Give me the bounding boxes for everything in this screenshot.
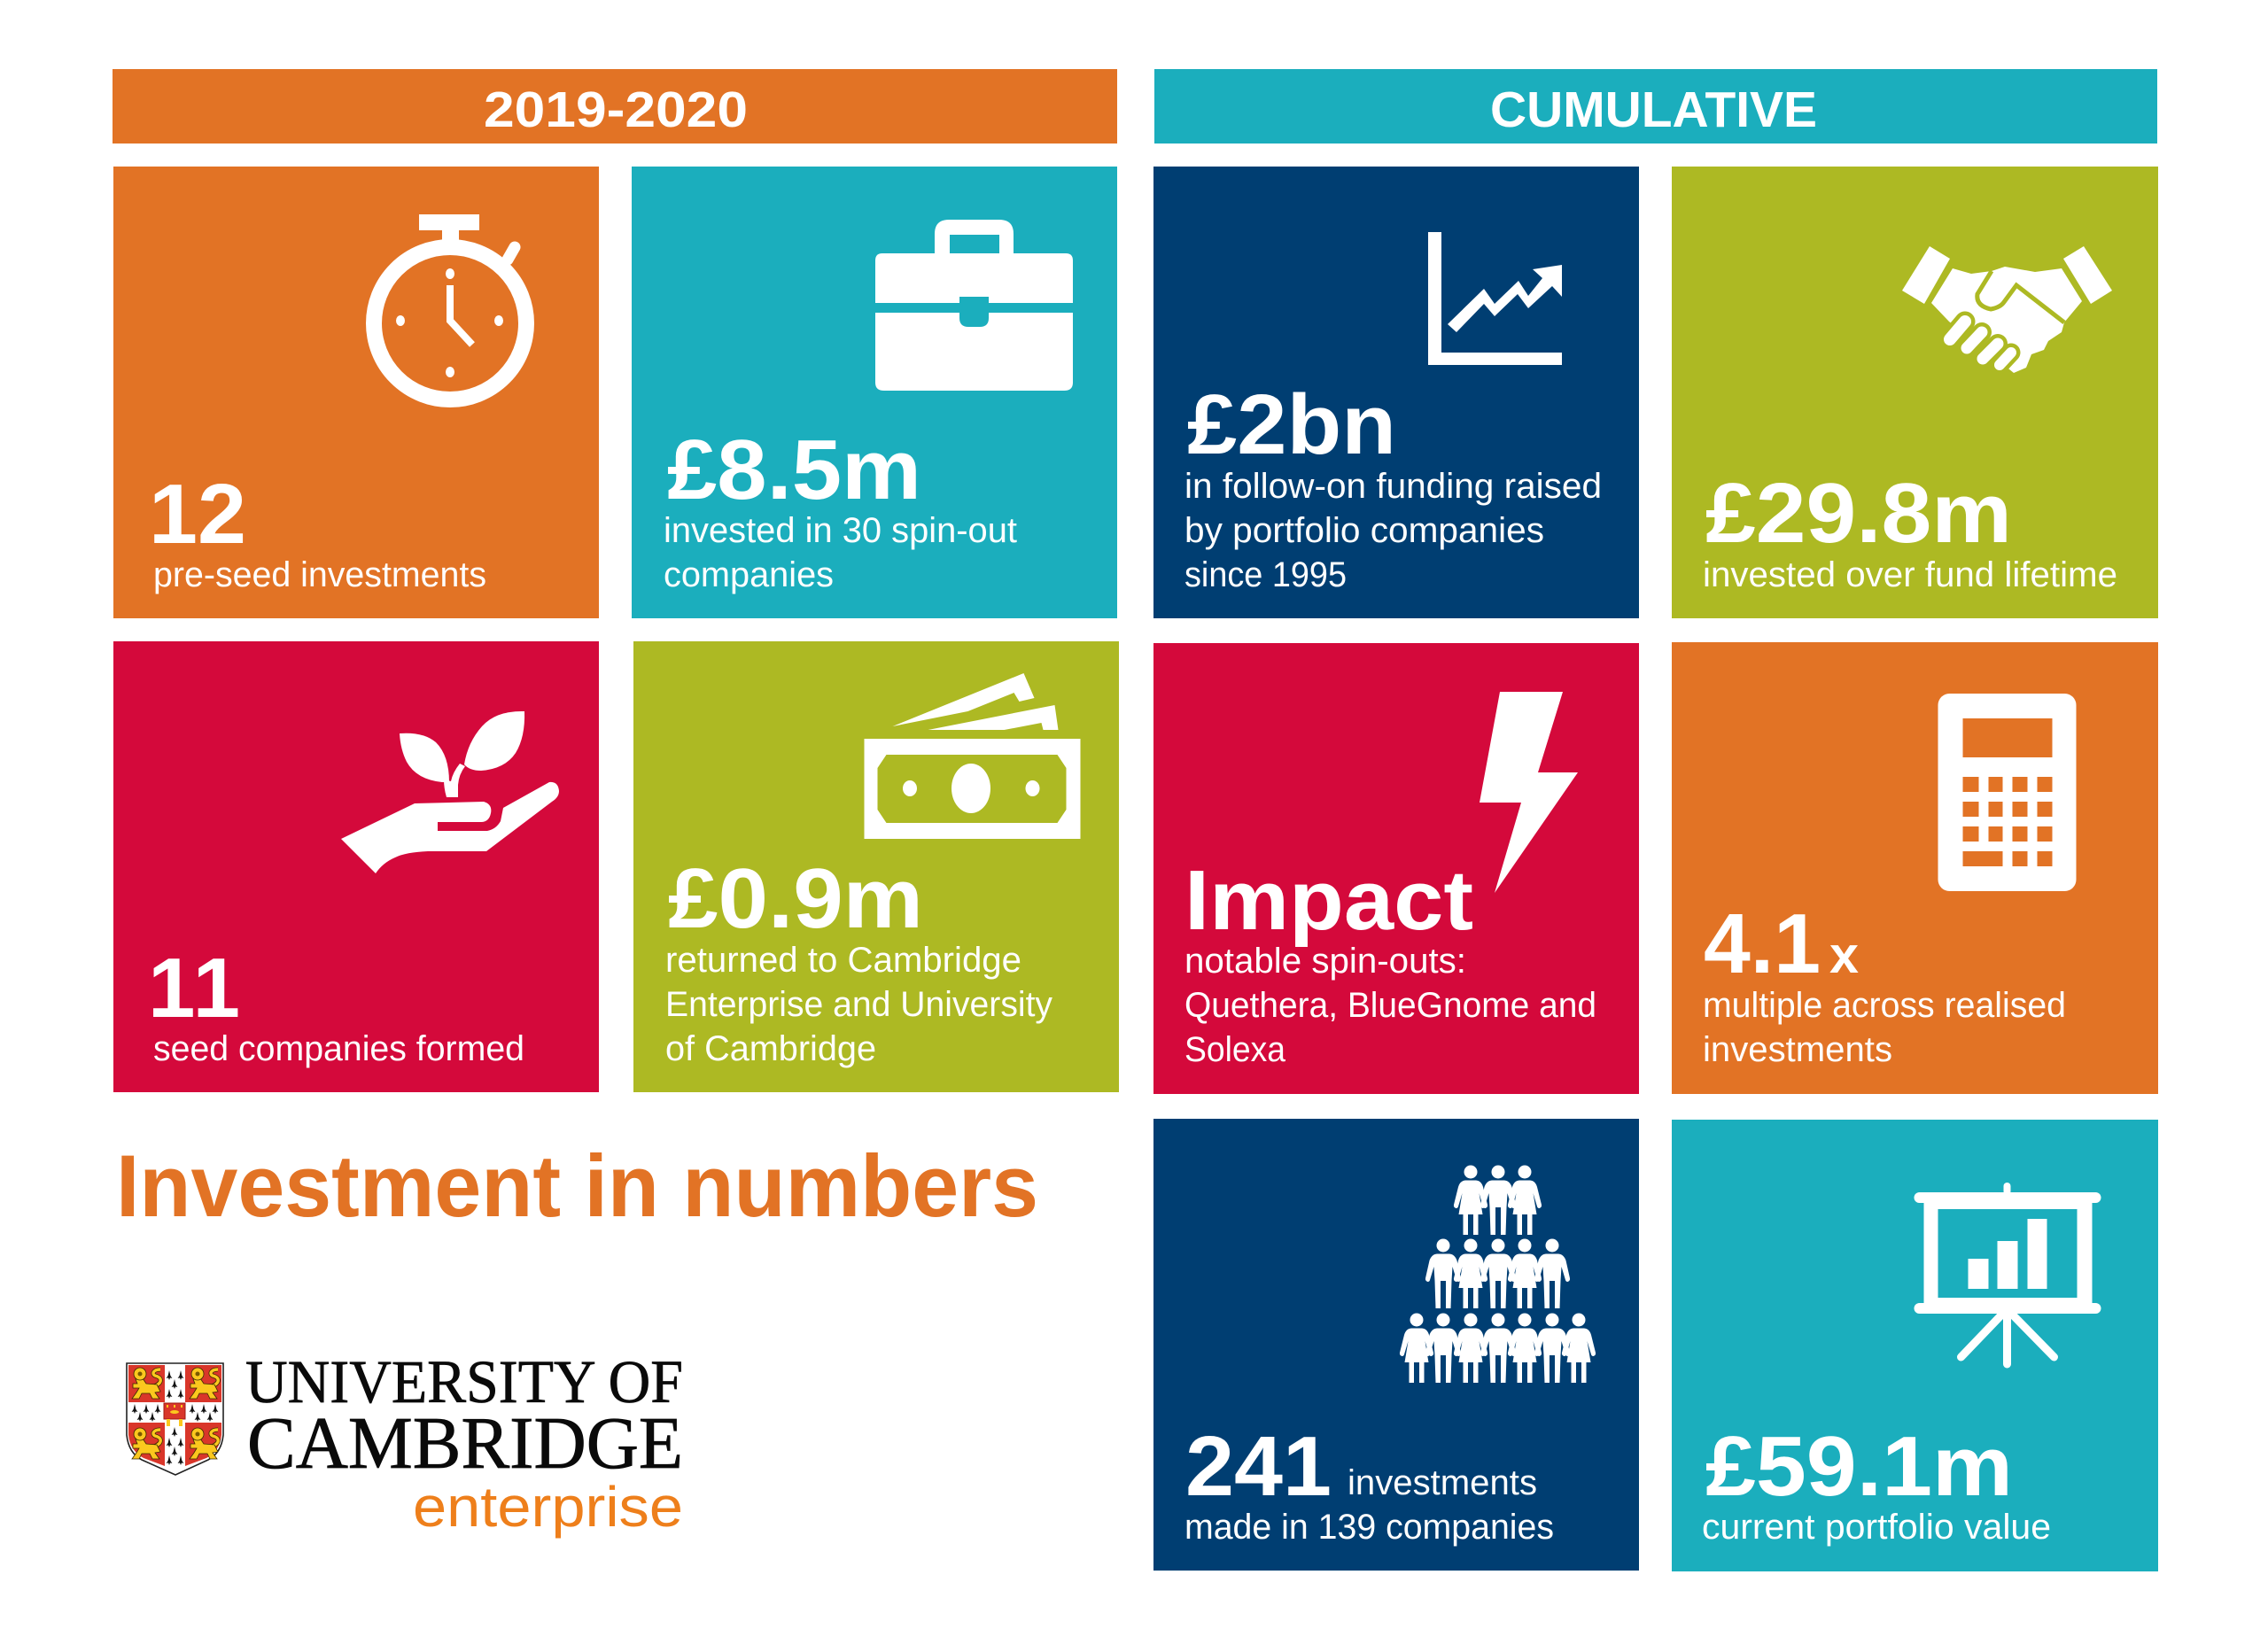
icon: briefcase: [875, 220, 1073, 391]
stat: £0.9m: £0.9m: [668, 851, 923, 946]
header: cumulative: [1154, 69, 2157, 144]
logo text: Cambridge: CAMBRIDGE: [247, 1402, 683, 1485]
description: invested in 30 spin-out companies: [664, 511, 1017, 594]
stat: £2bn: £2bn: [1187, 377, 1396, 472]
stat: 11: 11: [148, 941, 240, 1036]
stat: 12: 12: [149, 467, 246, 562]
description: notable spin-outs: Quethera, BlueGnome and: [1184, 986, 1596, 1025]
description: invested in 30 spin-out companies: invested in 30 spin-out: [664, 511, 1017, 550]
panel: invested in spin-out companies: [632, 167, 1117, 618]
header: 2019-2020: [113, 69, 1117, 144]
description: multiple across realised investments: [1703, 986, 2066, 1069]
panel: current portfolio value: [1672, 1120, 2158, 1571]
description: multiple across realised investments: investments: [1703, 1030, 1892, 1069]
description: in follow-on funding: since 1995: [1184, 555, 1347, 594]
panel: follow-on funding: [1153, 167, 1639, 618]
icon: hand holding seedling: [341, 711, 559, 873]
panel: invested over fund lifetime: [1672, 167, 2158, 618]
description: returned to Cambridge Enterprise and University of Cambridge: returned to Cambridge: [665, 941, 1021, 980]
description: returned to Cambridge Enterprise and University of Cambridge: of Cambridge: [665, 1029, 876, 1068]
panel: multiple across realised investments: [1672, 642, 2158, 1094]
panel: investments made: [1153, 1119, 1639, 1571]
header: 2019-2020: 2019-2020: [484, 81, 748, 138]
description: invested over fund lifetime: invested over fund lifetime: [1703, 555, 2117, 594]
description: investments made in 139 companies: made in 139 companies: [1184, 1508, 1554, 1547]
icon: rising chart: [1428, 232, 1562, 365]
icon: pyramid of people: [1400, 1166, 1596, 1383]
icon: presentation board: [1914, 1183, 2101, 1364]
description: pre-seed investments: pre-seed investments: [153, 555, 486, 594]
stat: £29.8m: £29.8m: [1705, 466, 2012, 561]
logo text: enterprise: enterprise: [413, 1475, 683, 1539]
icon: Cambridge coat of arms: [127, 1363, 223, 1475]
stat: 4.1x: x: [1829, 927, 1859, 984]
description: multiple across realised investments: multiple across realised: [1703, 986, 2066, 1025]
icon: calculator: [1938, 694, 2077, 891]
description: notable spin-outs: notable spin-outs:: [1184, 942, 1466, 981]
logo: University of Cambridge Enterprise: [127, 1348, 683, 1539]
icon: stopwatch: [374, 214, 526, 399]
description: notable spin-outs: Solexa: [1184, 1030, 1286, 1069]
icon: lightning bolt: [1480, 692, 1578, 893]
title: Investment in numbers: Investment in numbers: [116, 1136, 1038, 1235]
description: invested in 30 spin-out companies: companies: [664, 555, 834, 594]
description: returned to Cambridge Enterprise and University of Cambridge: Enterprise and University: [665, 985, 1052, 1024]
stat: 4.1x: 4.1: [1704, 896, 1821, 991]
logo text: University of: UNIVERSITY OF: [245, 1348, 683, 1416]
description: investments made in 139 companies: investments: [1348, 1463, 1537, 1502]
icon: banknotes: [865, 673, 1081, 839]
description: investments made in 139 companies: [1184, 1463, 1554, 1547]
description: in follow-on funding: [1184, 467, 1602, 594]
description: returned to Cambridge Enterprise and University of Cambridge: [665, 941, 1052, 1068]
panel: seed companies formed: [113, 641, 599, 1092]
stat: £8.5m: £8.5m: [667, 423, 921, 517]
stat: £59.1m: £59.1m: [1705, 1419, 2013, 1514]
description: in follow-on funding: in follow-on funding raised: [1184, 467, 1602, 506]
description: notable spin-outs: [1184, 942, 1596, 1069]
header: cumulative: CUMULATIVE: [1490, 81, 1817, 138]
description: current portfolio value: current portfolio value: [1702, 1508, 2051, 1547]
panel: impact: [1153, 643, 1639, 1094]
stat: 241: 241: [1185, 1419, 1332, 1514]
panel: pre-seed investments: [113, 167, 599, 618]
stat: Impact: Impact: [1184, 853, 1473, 948]
icon: handshake: [1902, 246, 2112, 373]
panel: returned to Cambridge: [633, 641, 1119, 1092]
description: in follow-on funding: by portfolio companies: [1184, 511, 1544, 550]
description: seed companies formed: seed companies formed: [153, 1029, 524, 1068]
